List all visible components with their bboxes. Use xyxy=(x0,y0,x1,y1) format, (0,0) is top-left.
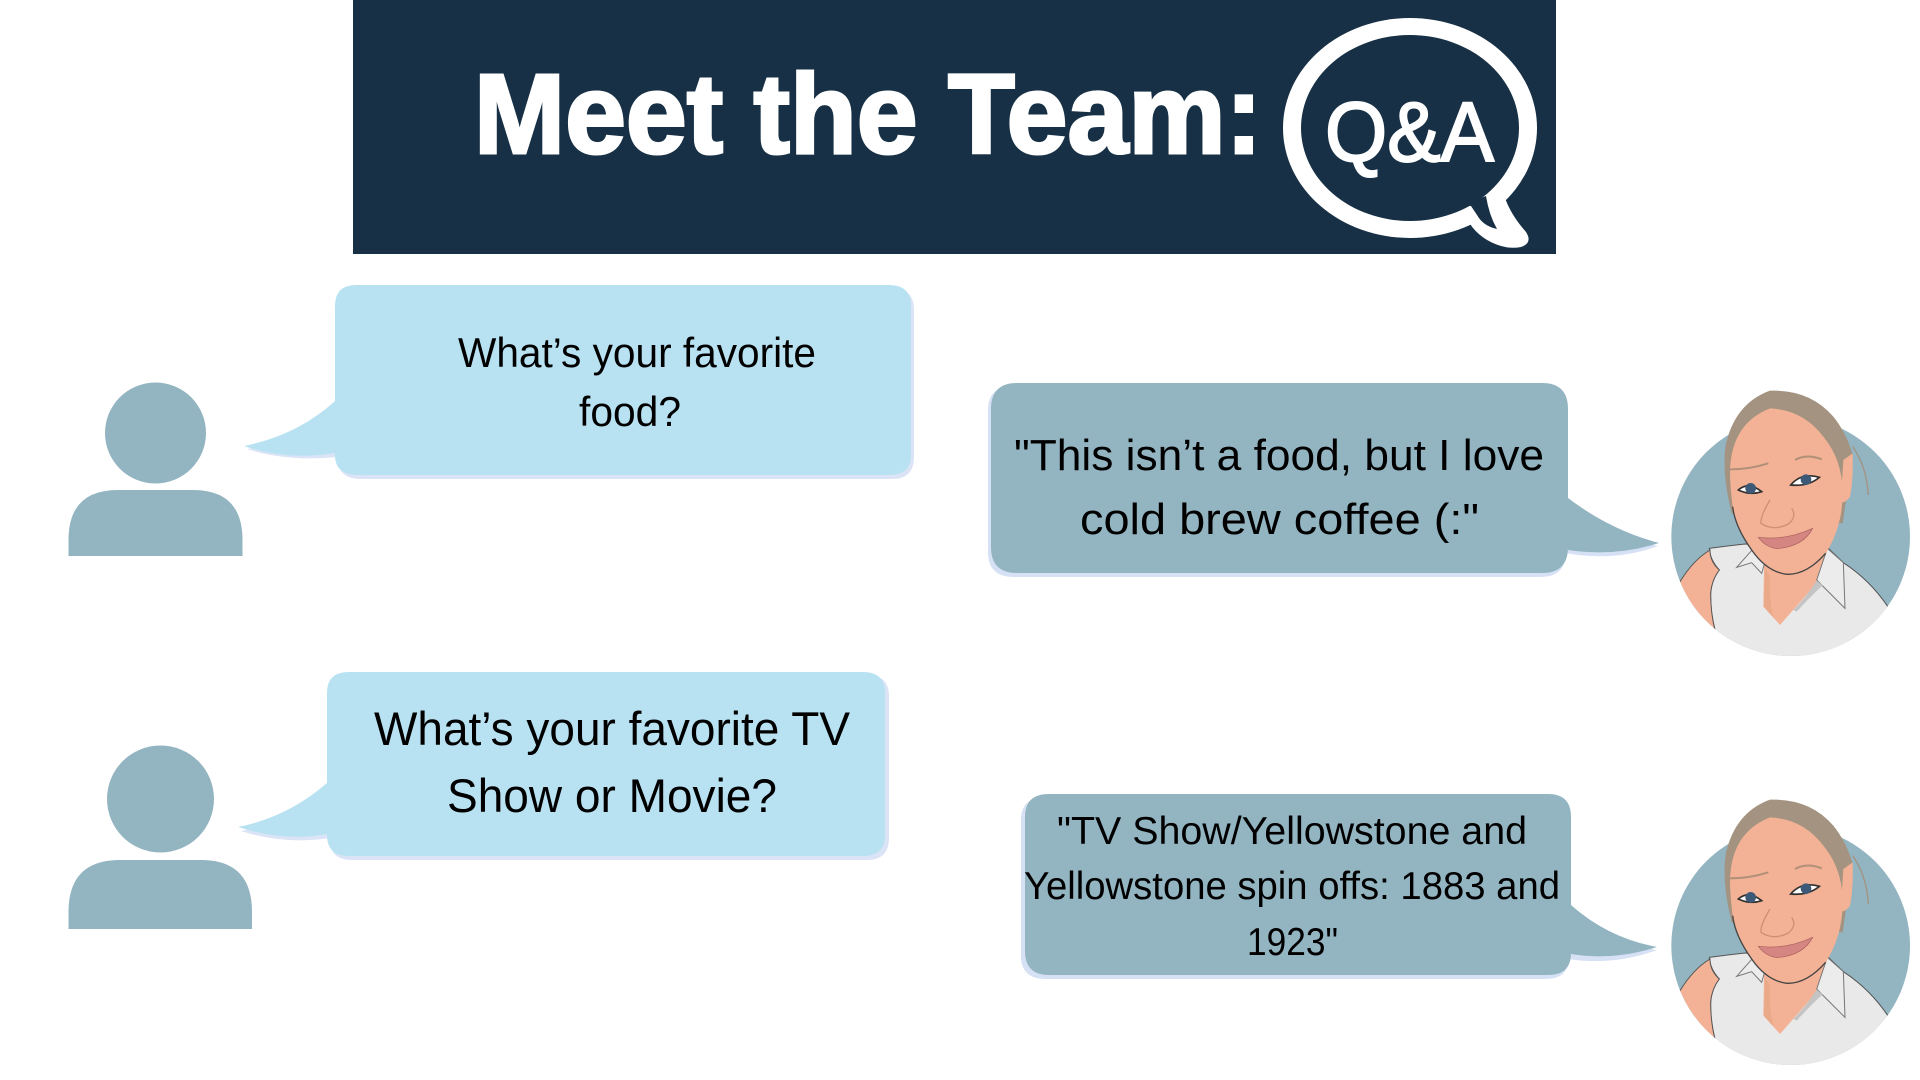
face xyxy=(1730,817,1843,983)
speech bubble: favorite food question: What’s your favorite xyxy=(458,329,816,376)
eyes xyxy=(1738,486,1762,493)
icon: Q&A speech bubble xyxy=(1283,18,1537,248)
speech bubble: favorite TV show question: What’s your favorite TV xyxy=(374,702,851,755)
speech bubble: cold brew answer: "This isn’t a food, but I love xyxy=(1014,431,1544,480)
speech bubble: favorite food question: food? xyxy=(579,388,681,435)
person icon: second asker xyxy=(68,746,252,929)
icon: Q&A speech bubble: Q&A xyxy=(1325,85,1494,179)
speech bubble: favorite TV show question xyxy=(238,672,889,860)
person icon: first asker xyxy=(68,382,242,556)
hair xyxy=(1725,391,1853,523)
title: Meet the Team: xyxy=(474,51,1262,177)
speech bubble: cold brew answer: cold brew coffee (:" xyxy=(1080,495,1479,544)
shirt xyxy=(1680,544,1888,656)
lips xyxy=(1758,937,1813,958)
header banner xyxy=(353,0,1556,254)
face xyxy=(1730,408,1843,574)
portrait: first answer xyxy=(1671,390,1910,656)
hair xyxy=(1725,800,1853,932)
portrait: second answer xyxy=(1671,800,1910,1065)
speech bubble: Yellowstone answer: 1923" xyxy=(1247,921,1338,964)
speech bubble: favorite food question xyxy=(244,285,914,479)
eyes xyxy=(1738,895,1762,902)
nose xyxy=(1761,500,1794,528)
nose xyxy=(1761,909,1794,937)
shirt xyxy=(1680,952,1888,1065)
lips xyxy=(1758,528,1813,549)
speech bubble: Yellowstone answer: Yellowstone spin offs: 1883 and xyxy=(1024,865,1560,908)
speech bubble: Yellowstone answer: "TV Show/Yellowstone and xyxy=(1057,810,1527,853)
speech bubble: cold brew answer xyxy=(988,383,1659,577)
speech bubble: favorite TV show question: Show or Movie? xyxy=(447,769,777,822)
speech bubble: Yellowstone answer xyxy=(1021,794,1657,979)
